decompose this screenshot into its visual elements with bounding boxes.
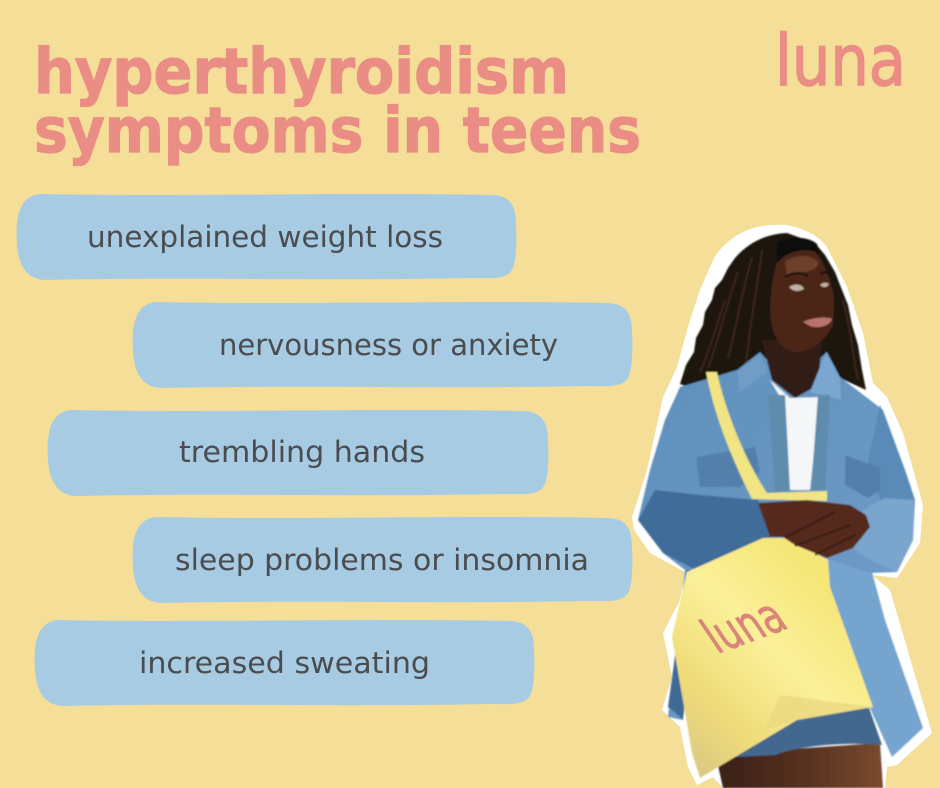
symptom pill: increased sweating: increased sweating (139, 646, 430, 680)
symptom pill: trembling hands: trembling hands (179, 435, 425, 469)
bag fold (765, 695, 873, 730)
symptom pill: trembling hands (48, 410, 548, 496)
symptom pill: increased sweating (35, 620, 534, 706)
tote bag (672, 538, 873, 778)
headband (777, 238, 820, 263)
bag strap (706, 372, 827, 501)
pockets (696, 447, 880, 498)
right cuff (852, 498, 914, 572)
eyes (789, 283, 829, 291)
white shirt (770, 380, 820, 490)
symptom pill: nervousness or anxiety (133, 302, 632, 388)
jacket long right panel (826, 540, 923, 757)
title: hyperthyroidism (34, 35, 569, 108)
symptom pill: nervousness or anxiety: nervousness or anxiety (219, 328, 558, 362)
logo: luna: luna (775, 20, 906, 102)
symptom pill: sleep problems or insomnia: sleep problems or insomnia (175, 543, 589, 577)
denim shorts (733, 705, 882, 757)
brows (785, 272, 829, 277)
collar left (737, 354, 768, 392)
hair (680, 233, 866, 392)
symptom pill: sleep problems or insomnia (133, 517, 632, 603)
hair highlights (700, 250, 858, 380)
hands (758, 500, 870, 558)
right sleeve (868, 405, 915, 500)
symptom pill: unexplained weight loss (17, 194, 516, 280)
symptom pill: unexplained weight loss: unexplained weight loss (87, 220, 443, 254)
lips (803, 318, 832, 327)
button placket (768, 395, 830, 492)
title: symptoms in teens (34, 94, 641, 167)
forehead highlight (785, 256, 818, 275)
jacket body (638, 352, 915, 720)
left lower jacket (668, 570, 700, 720)
collar right (810, 352, 841, 400)
left sleeve shadow (638, 490, 770, 572)
bag logo: luna (690, 588, 797, 664)
photo: teen with tote bag (632, 225, 932, 788)
face (770, 250, 834, 352)
white cutout outline (632, 225, 932, 788)
neck (762, 340, 822, 398)
title (34, 35, 641, 167)
person artwork (638, 233, 923, 788)
fingers (786, 512, 855, 555)
legs (718, 743, 883, 788)
